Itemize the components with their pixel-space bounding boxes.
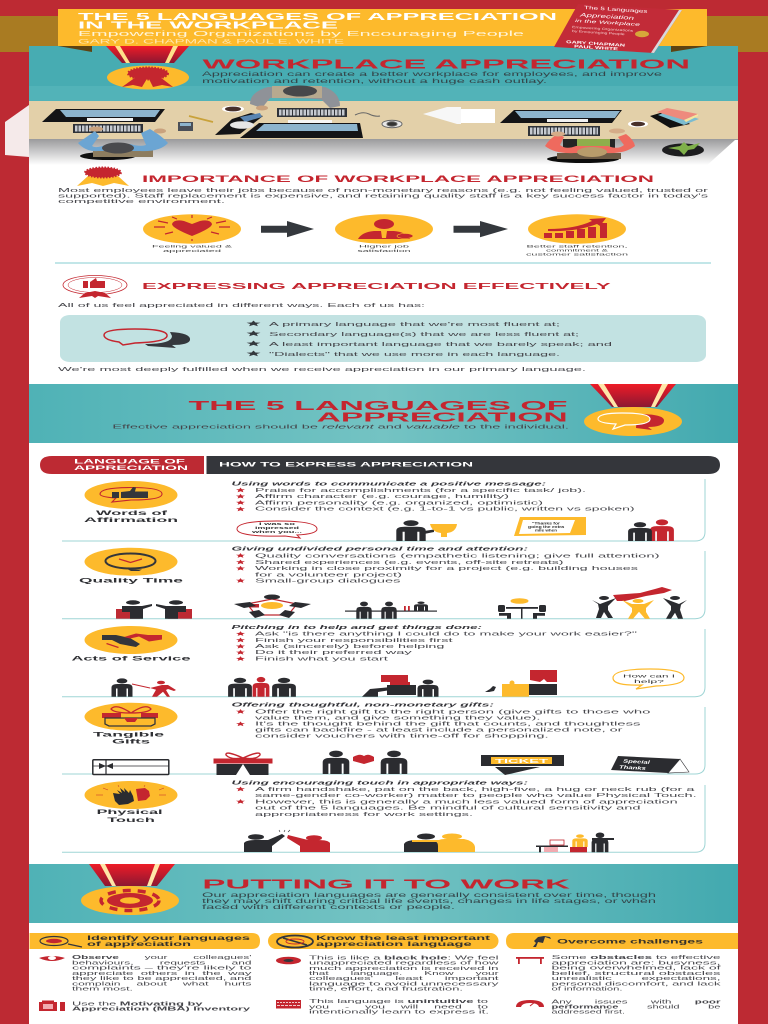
row: words of affirmation (62, 479, 705, 541)
intro text (202, 72, 664, 85)
illustration: desk encouragement (536, 832, 614, 852)
list: Offering thoughtful, non-monetary gifts: (232, 703, 494, 709)
book cover: The 5 Languages (584, 5, 648, 14)
text: black hole: This is like a black hole : We feel (309, 955, 498, 961)
book cover (554, 4, 682, 53)
plant (662, 142, 704, 156)
paper sheets (423, 107, 495, 124)
title (78, 12, 557, 32)
icon: speech bubbles (104, 329, 190, 348)
illustration: person with trophy (396, 520, 457, 541)
label (93, 732, 165, 745)
medal: speech bubbles (584, 384, 682, 436)
person: bottom left (78, 126, 168, 160)
illustration: note card: going the extra (528, 525, 564, 529)
text: obstacles: Some obstacles to effective (552, 955, 721, 961)
list: out of the 5 languages. Be mindful of cultural sensitivity and (255, 806, 640, 812)
column: least important language (268, 933, 500, 1015)
keyboard: centre (277, 108, 347, 117)
heading (188, 398, 568, 424)
arrow (261, 221, 314, 237)
pill heading: Identify your languages (87, 935, 251, 942)
text: observe: complain about what hurts (72, 981, 252, 987)
text: black hole: language to avoid unnecessary (309, 981, 500, 987)
book cover: in the Workplace (575, 19, 640, 27)
illustration: meeting table (498, 598, 546, 619)
panel: putting it to work (29, 864, 738, 923)
title: IN THE WORKPLACE (78, 20, 339, 32)
person: bottom right (545, 128, 635, 163)
pill heading: appreciation language (316, 941, 473, 948)
book cover: GARY CHAPMAN (566, 40, 625, 48)
illustration: ticket (481, 755, 564, 775)
list: Praise for accomplishments (for a specific task/ job). (255, 488, 587, 494)
list: Using words to communicate a positive message: (232, 481, 546, 487)
icon: handshake (84, 626, 178, 654)
label: Tangible (93, 732, 165, 739)
column head: how to (206, 456, 720, 474)
list: gifts can backfire - at least include a personalized note, or (255, 728, 623, 734)
list: appropriateness for work settings. (255, 812, 474, 818)
list: Shared experiences (e.g. events, off-site retreats) (255, 560, 564, 566)
monitor: right (500, 110, 622, 136)
text: black hole: colleagues' least important (309, 976, 500, 982)
text: obstacles: unrealistic expectations, (552, 976, 720, 982)
paragraph: faced with different contexts or people. (202, 905, 456, 911)
intro text: motivation and retention, without a huge cash outlay. (202, 79, 548, 85)
illustration: shoulder hug (404, 834, 475, 852)
label: Words of (96, 510, 169, 517)
list: Affirm personality (e.g. organized, optimistic) (255, 500, 543, 506)
row: quality time (62, 547, 705, 619)
paragraph: competitive environment. (58, 199, 226, 205)
book cover: Appreciation (579, 12, 635, 21)
illustration: gift exchange (323, 751, 407, 774)
label: Physical (97, 809, 163, 816)
list: Do it their preferred way (255, 650, 412, 656)
panel: the 5 languages (29, 384, 738, 443)
book cover: by Encouraging People (572, 29, 626, 36)
illustration: speech bubble: I was so (259, 522, 297, 526)
pill heading (268, 933, 498, 949)
text: obstacles (552, 955, 722, 992)
illustration: two colleagues (628, 519, 674, 541)
list: consider vouchers with time-off for shopping. (255, 734, 550, 740)
table header (40, 456, 720, 474)
list: Quality conversations (empathetic listening; give full attention) (255, 553, 660, 559)
caption: appreciated (163, 248, 221, 253)
text: obstacles: belief, structural obstacles (552, 971, 722, 977)
icon: hurdle (516, 957, 544, 964)
paragraph: Our appreciation languages are generally consistent over time, though (202, 893, 656, 899)
illustration: ticket: TICKET (495, 759, 550, 765)
list: A least important language that we barely speak; and (269, 342, 612, 348)
pill heading: of appreciation (87, 941, 191, 948)
icon: thumbs up (84, 481, 178, 509)
pill heading: Know the least important (316, 935, 490, 942)
heading: EXPRESSING APPRECIATION EFFECTIVELY (142, 281, 611, 291)
illustration: high five (244, 830, 330, 852)
laptop (240, 120, 363, 138)
illustration: team lifting box (362, 675, 438, 697)
list: Small-group dialogues (255, 578, 401, 584)
list: However, this is generally a much less valued form of appreciation (255, 799, 678, 805)
label: Quality Time (79, 577, 184, 584)
column: identify your languages (30, 933, 260, 1012)
text: obstacles: appreciation are: busyness, (552, 960, 720, 966)
icon: clock (84, 548, 178, 576)
list (232, 481, 635, 513)
illustration: speech bubble: impressed (255, 526, 301, 530)
illustration: three colleagues (228, 677, 296, 697)
text: observe: appreciate others in the way (72, 971, 253, 977)
label (84, 510, 178, 524)
list: for a volunteer project) (255, 572, 402, 578)
illustration: note card: mile when (535, 528, 557, 532)
illustration: two people in chairs (116, 600, 192, 619)
illustration: speech bubble: help? (634, 679, 665, 685)
medal: gear (81, 864, 179, 915)
illustration: group circle (234, 594, 311, 618)
section: importance of workplace appreciation (58, 168, 709, 256)
text: inventory: Appreciation (MBA) Inventory (72, 1006, 250, 1012)
list (232, 625, 637, 662)
icon: hands (84, 781, 178, 809)
row: physical touch (62, 780, 705, 852)
text: observe: complaints – they're likely to (72, 966, 252, 972)
person: top (250, 86, 340, 114)
text: poor performance: performance should be (552, 1004, 721, 1010)
text: inventory: Use the Motivating by (72, 1001, 203, 1007)
illustration: gift (214, 753, 272, 775)
heading: WORKPLACE APPRECIATION (202, 58, 690, 72)
icon: gauge (516, 1000, 544, 1007)
illustration: helping hand (112, 678, 176, 697)
callout panel (60, 315, 706, 362)
medal: rosette (106, 46, 189, 90)
icon: growth chart (528, 214, 626, 244)
pill heading (30, 933, 260, 949)
mouse and cable (355, 113, 402, 128)
icon: manager (335, 214, 433, 244)
column head: how to: HOW TO EXPRESS APPRECIATION (219, 461, 474, 468)
column head: language: APPRECIATION (74, 466, 188, 472)
illustration: speech bubble: when you... (250, 530, 302, 534)
label: Acts of Service (72, 655, 191, 662)
list: Pitching in to help and get things done: (232, 625, 482, 631)
label: Affirmation (84, 517, 178, 524)
lead-in: All of us feel appreciated in different ways. Each of us has: (58, 303, 426, 309)
intro text: Appreciation can create a better workplace for employees, and improve (202, 72, 664, 78)
text: black hole: that language. Know your (309, 971, 499, 977)
caption: Higher job (359, 244, 411, 249)
text: observe: behaviours, requests and (72, 960, 252, 966)
text: obstacles: personal discomfort, and lack (552, 981, 721, 987)
text: poor performance (552, 999, 721, 1015)
text: inventory (72, 1001, 250, 1012)
text: poor performance: addressed first. (552, 1009, 625, 1015)
column head: language: LANGUAGE OF (74, 459, 186, 465)
title: THE 5 LANGUAGES OF APPRECIATION (78, 12, 557, 23)
icon: black hole (276, 957, 301, 964)
label (97, 809, 163, 824)
pill heading (506, 933, 738, 949)
icon: heart (143, 214, 241, 244)
illustration: special thanks card (611, 756, 689, 773)
illustration: speech bubble: How can I (623, 674, 675, 680)
text: observe (72, 955, 253, 992)
pill heading: Overcome challenges (557, 938, 704, 945)
caption: satisfaction (358, 248, 410, 253)
icon: eye (39, 956, 65, 961)
list (232, 780, 698, 818)
heading: PUTTING IT TO WORK (202, 877, 570, 891)
illustration: group at table (345, 602, 437, 619)
list: "Dialects" that we use more in each language. (269, 352, 561, 358)
label: Touch (107, 817, 155, 824)
list (246, 321, 612, 358)
icon: rosette (77, 168, 129, 186)
subtitle: Empowering Organizations by Encouraging People (78, 29, 524, 38)
list: Giving undivided personal time and attention: (232, 547, 528, 553)
text: unintuitive: intentionally learn to express it. (309, 1009, 489, 1015)
illustration: speech bubble (613, 669, 684, 689)
book cover: PAUL WHITE (574, 45, 618, 52)
books (650, 108, 699, 128)
list: Ask "is there anything I could do to make your work easier?" (255, 631, 637, 637)
mug: right (628, 121, 648, 127)
caption (152, 244, 233, 253)
paragraph: supported). Staff replacement is expensive, and retaining quality staff is a key success factor in today's (58, 194, 709, 200)
list: Finish your responsibilities first (255, 638, 454, 644)
caption: commitment & (546, 248, 609, 252)
text: black hole: much appreciation is received in (309, 966, 499, 972)
column: overcome challenges (506, 933, 738, 1015)
text: observe: they like to be appreciated, and (72, 976, 252, 982)
list: It's the thought behind the gift that counts, and thoughtless (255, 722, 641, 728)
heading: IMPORTANCE OF WORKPLACE APPRECIATION (142, 174, 654, 184)
book cover: Empowering Organizations (572, 25, 633, 32)
list: Ask (sincerely) before helping (255, 644, 444, 650)
text: obstacles: of information. (552, 986, 622, 992)
paragraph (202, 893, 656, 911)
list: A firm handshake, pat on the back, high-five, a hug or neck rub (for a (255, 787, 697, 793)
gold banner strip (0, 16, 768, 52)
illustration: gift card (93, 760, 169, 774)
label: Gifts (112, 738, 151, 745)
text: observe: Observe your colleagues' (72, 955, 252, 961)
section: expressing appreciation (58, 276, 706, 373)
header banner (58, 4, 708, 53)
text: obstacles: being overwhelmed, lack of (552, 966, 722, 972)
list: Affirm character (e.g. courage, humility) (255, 494, 509, 500)
desk items: mug, pen, calculator (178, 106, 263, 135)
column head: language (40, 456, 204, 474)
illustration: special thanks card: Thanks (619, 765, 647, 771)
row: tangible gifts (62, 703, 705, 775)
monitor: left (42, 109, 165, 133)
text: unintuitive: you - you will need to (309, 1004, 488, 1010)
illustration: note card: "Thanks for (532, 522, 561, 526)
caption (358, 244, 411, 253)
caption (526, 244, 628, 256)
text: unintuitive: This language is unintuitive to (309, 999, 488, 1005)
icon: language block (276, 1000, 301, 1008)
subheading: Effective appreciation should be relevant and valuable to the individual. (112, 424, 570, 430)
paragraph: Most employees leave their jobs because of non-monetary reasons (e.g. not feeling valued, trusted or (58, 188, 708, 194)
list: Consider the context (e.g. 1-to-1 vs public, written vs spoken) (255, 507, 635, 513)
illustration: special thanks card: Special (623, 759, 650, 765)
icon: thumbs-up badge (63, 276, 127, 298)
list: A primary language that we're most fluent at; (269, 322, 561, 328)
list: Using encouraging touch in appropriate ways: (232, 780, 528, 786)
row: acts of service (62, 625, 705, 697)
closing line: We're most deeply fulfilled when we receive appreciation in our primary language. (58, 367, 587, 373)
illustration: puzzle pieces (485, 670, 557, 697)
list: Finish what you start (255, 656, 389, 662)
list: Working in close proximity for a project (e.g. building houses (255, 566, 639, 572)
text: black hole (309, 955, 500, 992)
list: same-gender co-worker) matter to people who value Physical Touch. (255, 793, 698, 799)
icon: clipboard (39, 1000, 65, 1011)
illustration: note card (514, 517, 586, 536)
text: unintuitive (309, 999, 489, 1015)
list: value them, and give something they value). (255, 715, 542, 721)
illustration: speech bubble (237, 521, 317, 538)
text: observe: them most. (72, 986, 133, 992)
heading: APPRECIATION (317, 409, 568, 424)
list: Offer the right gift to the right person (give gifts to those who (255, 709, 650, 715)
illustration: crowd lift (592, 587, 687, 619)
list (232, 547, 660, 584)
text: black hole: time, effort, and frustration. (309, 986, 463, 992)
authors: GARY D. CHAPMAN & PAUL E. WHITE (78, 38, 344, 46)
list: Secondary language(s) that we are less fluent at; (269, 332, 580, 338)
panel: workplace appreciation (5, 46, 738, 167)
paragraph (58, 188, 709, 205)
text: poor performance: Any issues with poor (552, 999, 720, 1005)
caption: Better staff retention, (526, 244, 628, 249)
heading: THE 5 LANGUAGES OF (188, 398, 568, 413)
caption: customer satisfaction (526, 252, 628, 256)
text: black hole: unappreciated regardless of how (309, 960, 499, 966)
icon: gift box (84, 703, 178, 731)
desk scene (5, 86, 738, 167)
arrow (454, 221, 508, 237)
paragraph: they may shift during critical life events, changes in life stages, or when (202, 899, 656, 905)
list (232, 703, 650, 740)
caption: Feeling valued & (152, 244, 233, 249)
